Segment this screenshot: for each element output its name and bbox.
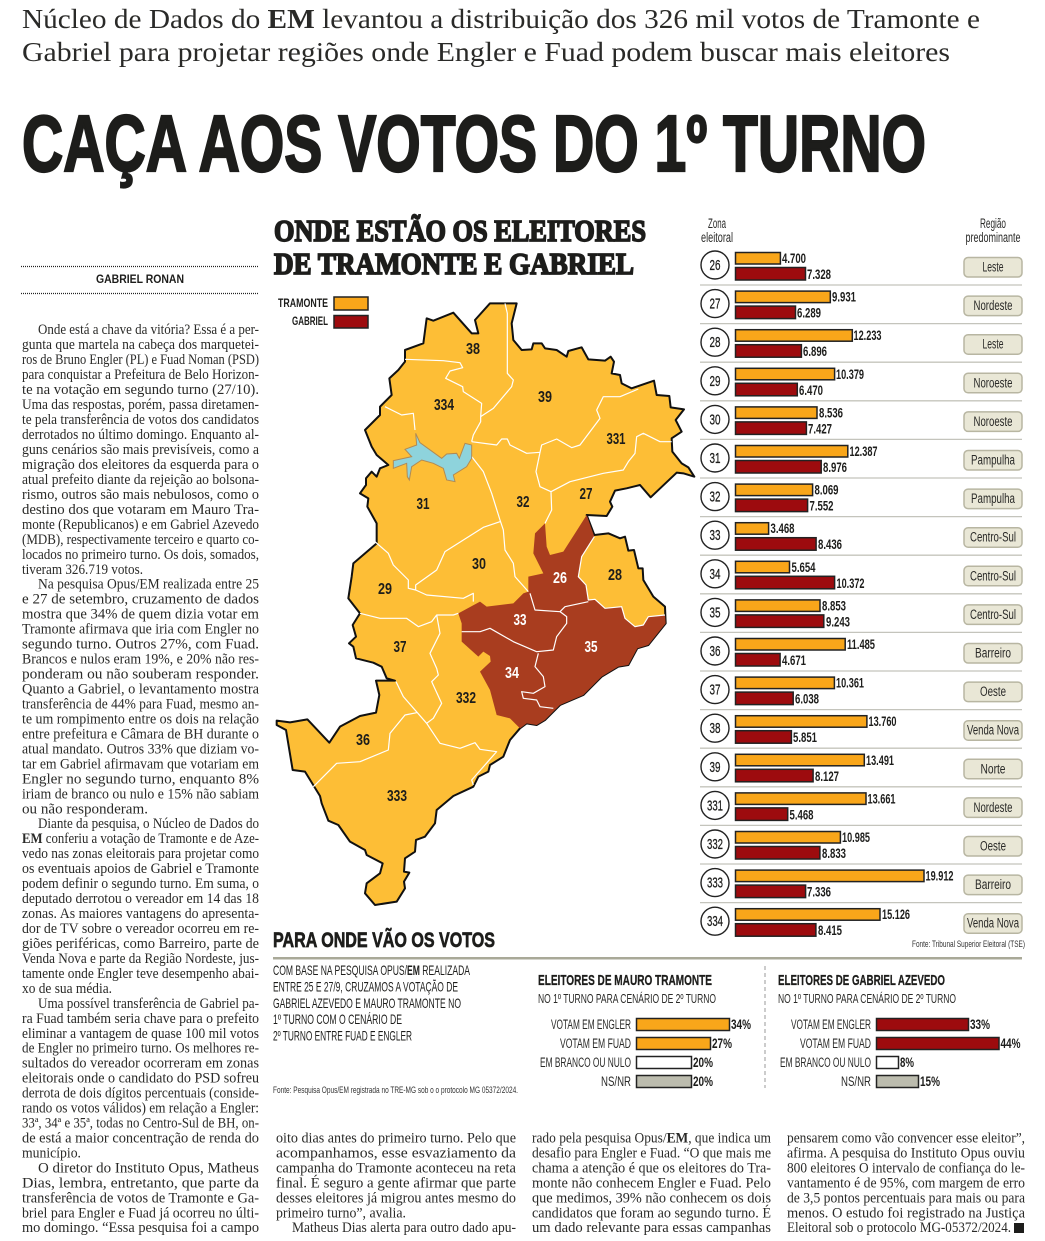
row: zone 35: Centro-Sul	[970, 607, 1016, 622]
zone chart column headers: Zona	[708, 216, 726, 231]
row: zone 26: 26	[710, 258, 720, 274]
map: Pampulha lagoon	[393, 433, 472, 482]
row: zone 34: Centro-Sul	[970, 568, 1016, 583]
article text: left column: tamente onde Engler teve desempenho abai-	[22, 966, 259, 982]
article text: bottom column 2: candidatos que foram ao segundo turno. É	[532, 1204, 771, 1222]
article text: bottom column 2: monte não conhecem Engler e Fuad. Pelo	[532, 1176, 771, 1192]
article text: left column: locados no primeiro turno. Os dois, somados,	[22, 547, 259, 563]
article text: left column: sultados do vereador ocorreram em zonas	[22, 1056, 259, 1072]
row: zone 32: 8.069	[814, 482, 839, 498]
row: zone 34: 10.372	[836, 575, 865, 591]
row: zone 31: 31	[710, 451, 720, 467]
bar chart: votes by electoral zone	[700, 250, 1022, 938]
article text: left column: migração dos eleitores da esquerda para o	[22, 457, 259, 473]
poll chart: Mauro Tramonte voters: VOTAM EM FUAD	[560, 1036, 631, 1051]
row: zone 27	[701, 289, 1022, 321]
article text: bottom column 1: campanha do Tramonte aconteceu na reta	[276, 1160, 517, 1176]
poll intro text: ENTRE 25 E 27/9, CRUZAMOS A VOTAÇÃO DE	[273, 978, 458, 994]
row: zone 332: 8.833	[822, 845, 846, 861]
article text: left column: os eventuais apoios de Gabriel e Tramonte	[22, 861, 259, 877]
map zone labels: 332	[456, 690, 476, 707]
article text: bottom column 2: chama a atenção é que os eleitores do Tra-	[532, 1160, 771, 1176]
article text: left column: iriam de branco ou nulo e 15% não sabiam	[22, 786, 259, 802]
poll intro text: GABRIEL AZEVEDO E MAURO TRAMONTE NO	[273, 995, 461, 1011]
article text: left column: destino dos que votaram em Mauro Tra-	[22, 502, 259, 518]
article text: left column: guns cenários são mais previsíveis, como a	[22, 442, 260, 458]
row: zone 332: 10.985	[842, 829, 870, 845]
row: zone 333: Barreiro	[975, 877, 1011, 892]
poll chart: Gabriel Azevedo voters: 44%	[1000, 1035, 1021, 1051]
article text: left column: gunta que martela na cabeça dos marquetei-	[22, 337, 259, 353]
row: zone 33: Centro-Sul	[970, 530, 1016, 545]
article text: left column: deputado derrotou o vereador em 14 das 18	[22, 891, 259, 907]
row: zone 333: 7.336	[807, 884, 831, 900]
map zone labels: 28	[608, 567, 622, 584]
row: zone 333: 333	[707, 876, 723, 892]
map zone labels: 33	[514, 612, 527, 629]
article text: left column: te pela transferência de votos dos candidatos	[22, 412, 259, 428]
row: zone 29: 6.470	[799, 382, 823, 398]
row: zone 334: 334	[707, 914, 723, 930]
article text: left column: mo domingo. “Essa pesquisa foi a campo	[22, 1220, 259, 1236]
article text: left column: te na votação em segundo turno (27/10).	[22, 382, 259, 398]
row: zone 30	[701, 404, 1022, 436]
row: zone 33: 8.436	[818, 536, 842, 552]
article text: bottom column 1: oito dias antes do primeiro turno. Pelo que	[276, 1130, 516, 1146]
article text: left column: podem definir o segundo turno. Em suma, o	[22, 876, 259, 892]
poll intro text: COM BASE NA PESQUISA OPUS/EM REALIZADA	[273, 962, 470, 978]
map zone labels: 37	[394, 639, 407, 656]
row: zone 331: 331	[707, 798, 723, 814]
map zone labels: 36	[356, 732, 370, 749]
article text: left column: te um rompimento entre os dois na relação	[22, 712, 259, 728]
row: zone 27: 6.289	[797, 305, 821, 321]
row: zone 36	[701, 636, 1022, 668]
article text: bottom column 2	[532, 1130, 771, 1236]
article text: left column: eliminar a vantagem de quase 100 mil votos	[22, 1026, 259, 1042]
article text: left column: tar em Gabriel afirmavam que votariam em	[22, 756, 259, 772]
map zone boundaries	[313, 303, 672, 787]
poll chart: Mauro Tramonte voters: 34%	[731, 1016, 751, 1032]
poll chart: Gabriel Azevedo voters: NS/NR	[841, 1074, 871, 1089]
article text: bottom column 2: que medimos, 39% não conhecem os dois	[532, 1190, 771, 1206]
article text: left column: ponderam ou não souberam responder.	[22, 666, 259, 682]
row: zone 32	[701, 482, 1022, 514]
row: zone 28: Leste	[982, 337, 1004, 352]
article text: left column: zonas. As maiores vantagens do apresenta-	[22, 906, 259, 922]
article text: left column: eleitorais onde o candidato do PSD sofreu	[22, 1070, 259, 1086]
article text: left column: ros de Bruno Engler (PL) e Fuad Noman (PSD)	[22, 352, 259, 368]
section heading: para onde vão os votos: PARA ONDE VÃO OS VOTOS	[273, 929, 495, 952]
zone chart column headers: eleitoral	[701, 230, 733, 245]
poll chart: Mauro Tramonte voters	[538, 972, 751, 1089]
row: zone 334	[701, 906, 1022, 938]
article text: left column: Uma das respostas, porém, passa diretamen-	[22, 397, 259, 413]
row: zone 35: 35	[710, 605, 720, 621]
map zone labels: 26	[553, 570, 567, 587]
zone chart column headers: Região	[980, 216, 1006, 231]
map zone labels: 333	[387, 788, 407, 805]
row: zone 31: 12.387	[850, 443, 878, 459]
article text: bottom column 3: de 3,5 pontos percentuais para mais ou para	[787, 1190, 1026, 1206]
row: zone 332: 332	[707, 837, 723, 853]
article text: left column: tiveram 326.719 votos.	[22, 562, 143, 578]
row: zone 26: 4.700	[782, 250, 806, 266]
row: zone 35	[701, 597, 1022, 629]
article text: left column: entre prefeitura e Câmara de BH durante o	[22, 726, 259, 742]
row: zone 29: Noroeste	[974, 375, 1012, 390]
poll intro text	[273, 962, 470, 1044]
row: zone 27: 27	[710, 297, 720, 313]
map zone labels: 31	[416, 496, 430, 513]
poll chart: Mauro Tramonte voters: EM BRANCO OU NULO	[540, 1055, 631, 1070]
article text: bottom column 3: pensarem como vão convencer esse eleitor”,	[787, 1130, 1025, 1146]
row: zone 31	[701, 443, 1022, 475]
map heading	[274, 213, 646, 281]
article text: left column: de está a maior concentração de renda do	[22, 1130, 259, 1146]
map zone labels: 35	[584, 639, 598, 656]
row: zone 38: 5.851	[793, 729, 817, 745]
row: zone 39	[701, 752, 1022, 784]
article text: bottom column 3: afirma. A pesquisa do Instituto Opus ouviu	[787, 1146, 1025, 1162]
row: zone 34	[701, 559, 1022, 591]
row: zone 38	[701, 713, 1022, 745]
row: zone 32: Pampulha	[971, 491, 1015, 506]
article text: left column: município.	[22, 1146, 81, 1162]
map zone labels: 30	[472, 556, 486, 573]
row: zone 334: 15.126	[882, 906, 910, 922]
map zone labels: 334	[434, 397, 454, 414]
row: zone 30: 30	[710, 412, 720, 428]
row: zone 37: 10.361	[836, 675, 864, 691]
map zone labels: 32	[516, 494, 530, 511]
article text: left column: mostra que 34% de quem dizia votar em	[22, 606, 259, 622]
article text: left column: Diante da pesquisa, o Núcleo de Dados do	[38, 816, 259, 832]
article text: left column: Venda Nova e parte da Região Nordeste, jus-	[22, 951, 259, 967]
article text: left column: O diretor do Instituto Opus, Matheus	[38, 1160, 259, 1176]
row: zone 39: 39	[710, 760, 720, 776]
article text: left column: e 27 de setembro, cruzamento de dados	[22, 592, 259, 608]
row: zone 39: 13.491	[866, 752, 894, 768]
row: zone 36: Barreiro	[975, 646, 1011, 660]
row: zone 33	[701, 520, 1022, 552]
row: zone 39: Norte	[980, 761, 1006, 776]
article text: left column: Dias, lembra, entretanto, que parte da	[22, 1176, 260, 1192]
row: zone 32: 7.552	[810, 498, 834, 514]
article text: left column: atual mandato. Outros 33% que diziam vo-	[22, 742, 259, 758]
poll chart: Mauro Tramonte voters: ELEITORES DE MAURO TRAMONTE	[538, 972, 712, 989]
row: zone 331: 13.661	[868, 790, 896, 806]
article text: left column: derrotados no último domingo. Enquanto al-	[22, 427, 259, 443]
article text: bottom column 2: um dado relevante para essas campanhas	[532, 1220, 771, 1236]
map zone labels: 27	[580, 486, 593, 503]
row: zone 33: 33	[710, 528, 720, 544]
poll chart: Mauro Tramonte voters: NO 1º TURNO PARA CENÁRIO DE 2º TURNO	[538, 991, 716, 1006]
poll chart: Mauro Tramonte voters: 20%	[693, 1054, 713, 1070]
row: zone 30: Noroeste	[974, 414, 1012, 429]
article text: left column: rando os votos válidos) em relação a Engler:	[22, 1100, 259, 1116]
row: zone 26: Leste	[982, 260, 1004, 274]
row: zone 37	[701, 675, 1022, 707]
article text: left column: ou não responderam.	[22, 802, 148, 818]
row: zone 34: 34	[710, 567, 720, 583]
row: zone 331: Nordeste	[974, 800, 1012, 815]
poll chart: Mauro Tramonte voters: 20%	[693, 1073, 713, 1089]
map heading: DE TRAMONTE E GABRIEL	[274, 246, 634, 281]
article text: left column: Onde está a chave da vitória? Essa é a per-	[38, 322, 259, 338]
poll chart: Mauro Tramonte voters: NS/NR	[601, 1074, 631, 1089]
row: zone 34: 5.654	[792, 559, 816, 575]
row: zone 334: 8.415	[818, 922, 842, 938]
row: zone 32: 32	[710, 490, 720, 506]
row: zone 29	[701, 366, 1022, 398]
row: zone 36: 11.485	[847, 636, 875, 652]
subtitle	[22, 3, 980, 67]
byline: GABRIEL RONAN	[96, 272, 184, 286]
row: zone 37: 37	[710, 683, 720, 699]
row: zone 30: 8.536	[819, 404, 843, 420]
article text: left column: Na pesquisa Opus/EM realizada entre 25	[38, 576, 259, 592]
article text: left column: Quanto a Gabriel, o levantamento mostra	[22, 682, 260, 698]
article text: left column: derrota de dois dígitos percentuais (conside-	[22, 1086, 259, 1102]
article text: bottom column 1: Matheus Dias alerta para outro dado apu-	[292, 1220, 516, 1236]
map zone labels: 29	[378, 581, 392, 598]
poll chart: Mauro Tramonte voters: 27%	[712, 1035, 732, 1051]
zone chart column headers	[701, 216, 1020, 245]
article text: left column: segundo turno. Outros 27%, com Fuad.	[22, 636, 259, 652]
article text: left column: Uma possível transferência de Gabriel pa-	[38, 996, 259, 1012]
row: zone 38: 38	[710, 721, 720, 737]
row: zone 37: Oeste	[980, 684, 1006, 699]
row: zone 332	[701, 829, 1022, 861]
article text: bottom column 2: desafio para Engler e Fuad. “O que mais me	[532, 1146, 771, 1162]
map heading: ONDE ESTÃO OS ELEITORES	[274, 213, 646, 248]
row: zone 37: 6.038	[795, 691, 819, 707]
row: zone 39: 8.127	[815, 768, 839, 784]
row: zone 331: 5.468	[790, 806, 814, 822]
row: zone 331	[701, 790, 1022, 822]
row: zone 29: 10.379	[836, 366, 864, 382]
article text: left column: briel para Engler e Fuad já ocorreu no últi-	[22, 1206, 259, 1222]
map zone labels: 38	[466, 341, 480, 358]
row: zone 38: Venda Nova	[967, 723, 1019, 738]
row: zone 28: 12.233	[854, 327, 882, 343]
article text: left column: monte (Republicanos) e em Gabriel Azevedo	[22, 517, 259, 533]
article text: left column: xo de sua média.	[22, 981, 112, 997]
article text: bottom column 3: Eleitoral sob o protocolo MG-05372/2024.	[787, 1220, 1011, 1236]
poll intro text: 2º TURNO ENTRE FUAD E ENGLER	[273, 1028, 412, 1044]
article text: bottom column 3: 800 eleitores O intervalo de confiança do le-	[787, 1160, 1025, 1176]
article text: bottom column 2: rado pela pesquisa Opus/EM, que indica um	[532, 1130, 771, 1146]
subtitle: Núcleo de Dados do EM levantou a distribuição dos 326 mil votos de Tramonte e	[22, 3, 980, 34]
map legend	[278, 296, 368, 328]
article text: bottom column 1: desses eleitores já migrou antes mesmo do	[276, 1190, 516, 1206]
map legend: GABRIEL	[292, 314, 328, 328]
poll chart: Gabriel Azevedo voters: ELEITORES DE GABRIEL AZEVEDO	[778, 972, 945, 989]
row: zone 33: 3.468	[770, 520, 795, 536]
row: zone 38: 13.760	[868, 713, 897, 729]
article text: left column: Brancos e nulos eram 19%, e 20% não res-	[22, 652, 259, 668]
poll chart: Gabriel Azevedo voters: 33%	[970, 1016, 990, 1032]
poll chart: Mauro Tramonte voters: VOTAM EM ENGLER	[551, 1017, 631, 1032]
row: zone 36: 36	[710, 644, 720, 660]
source: Opus poll: Fonte: Pesquisa Opus/EM registrada no TRE-MG sob o o protocolo MG 05372/2024.	[273, 1085, 518, 1096]
article text: bottom column 3	[787, 1130, 1026, 1236]
poll chart: Gabriel Azevedo voters: EM BRANCO OU NULO	[780, 1055, 871, 1070]
map zone labels: 34	[505, 665, 519, 682]
poll chart: Gabriel Azevedo voters: VOTAM EM ENGLER	[791, 1017, 871, 1032]
map zone labels: 331	[606, 431, 626, 448]
article text: left column: transferência de 44% para Fuad, mesmo an-	[22, 696, 259, 712]
map zones won by Gabriel: 26, 33, 34, 35	[458, 515, 666, 728]
article text: left column: ra Fuad também seria chave para o prefeito	[22, 1011, 259, 1027]
row: zone 333	[701, 868, 1022, 900]
map of Belo Horizonte electoral zones	[277, 303, 694, 905]
map base: city outline	[277, 303, 694, 905]
poll chart: Gabriel Azevedo voters	[778, 972, 1021, 1089]
row: zone 26: 7.328	[807, 266, 831, 282]
poll intro text: 1º TURNO COM O CENÁRIO DE	[273, 1011, 402, 1027]
article text: bottom column 1	[276, 1130, 517, 1236]
article text: bottom column 1: acompanhamos, esse esvaziamento da	[276, 1146, 517, 1162]
row: zone 31: 8.976	[823, 459, 847, 475]
article text: left column: EM conferiu a votação de Tramonte e de Aze-	[22, 831, 259, 847]
poll chart: Gabriel Azevedo voters: VOTAM EM FUAD	[800, 1036, 871, 1051]
article text: left column: vedo nas zonas eleitorais para projetar como	[22, 846, 259, 862]
poll chart: Gabriel Azevedo voters: 8%	[900, 1054, 914, 1070]
subtitle: Gabriel para projetar regiões onde Engler e Fuad podem buscar mais eleitores	[22, 36, 950, 67]
article text: left column: Engler no segundo turno, enquanto 8%	[22, 772, 259, 788]
row: zone 26	[701, 250, 1022, 282]
article text: bottom column 1: final. É seguro a gente afirmar que parte	[276, 1174, 516, 1192]
map zone labels: 39	[538, 389, 552, 406]
row: zone 28	[701, 327, 1022, 359]
row: zone 35: 8.853	[822, 597, 846, 613]
article text: left column: dor de TV sobre o vereador ocorreu em re-	[22, 921, 259, 937]
article text: bottom column 3: menos. O estudo foi registrado na Justiça	[787, 1206, 1026, 1222]
row: zone 332: Oeste	[980, 838, 1006, 854]
map legend: TRAMONTE	[278, 296, 328, 310]
article text: left column: transferência de votos de Tramonte e Ga-	[22, 1190, 259, 1206]
row: zone 31: Pampulha	[971, 452, 1015, 468]
article text: left column: Tramonte afirmava que iria com Engler no	[22, 622, 259, 638]
article text: left column: 33ª, 34ª e 35ª, todas no Centro-Sul de BH, on-	[22, 1116, 259, 1132]
row: zone 27: 9.931	[832, 289, 856, 305]
article text: left column: rismo, outros são mais nebulosos, como o	[22, 487, 259, 503]
row: zone 333: 19.912	[926, 868, 954, 884]
article text: left column	[22, 322, 260, 1236]
poll chart: Gabriel Azevedo voters: NO 1º TURNO PARA CENÁRIO DE 2º TURNO	[778, 991, 956, 1006]
article text: bottom column 1: primeiro turno”, avalia.	[276, 1206, 406, 1222]
row: zone 334: Venda Nova	[967, 916, 1019, 931]
article text: left column: (MDB), respectivamente terceiro e quarto co-	[22, 532, 259, 548]
row: zone 27: Nordeste	[974, 298, 1012, 313]
poll chart: Gabriel Azevedo voters: 15%	[920, 1073, 940, 1089]
article text: bottom column 3: vantamento é de 95%, com margem de erro	[787, 1176, 1025, 1192]
row: zone 28: 28	[710, 335, 720, 351]
article text: left column: atual prefeito diante da rejeição ao bolsona-	[22, 472, 259, 488]
row: zone 36: 4.671	[782, 652, 806, 668]
row: zone 30: 7.427	[808, 420, 832, 436]
row: zone 29: 29	[710, 374, 720, 390]
map zone labels	[356, 341, 626, 805]
article text: left column: giões periféricas, como Barreiro, parte de	[22, 936, 259, 952]
article text: left column: de Engler no primeiro turno. Os melhores re-	[22, 1040, 259, 1056]
row: zone 28: 6.896	[803, 343, 827, 359]
article text: left column: para conquistar a Prefeitura de Belo Horizon-	[22, 367, 259, 383]
row: zone 35: 9.243	[826, 613, 850, 629]
